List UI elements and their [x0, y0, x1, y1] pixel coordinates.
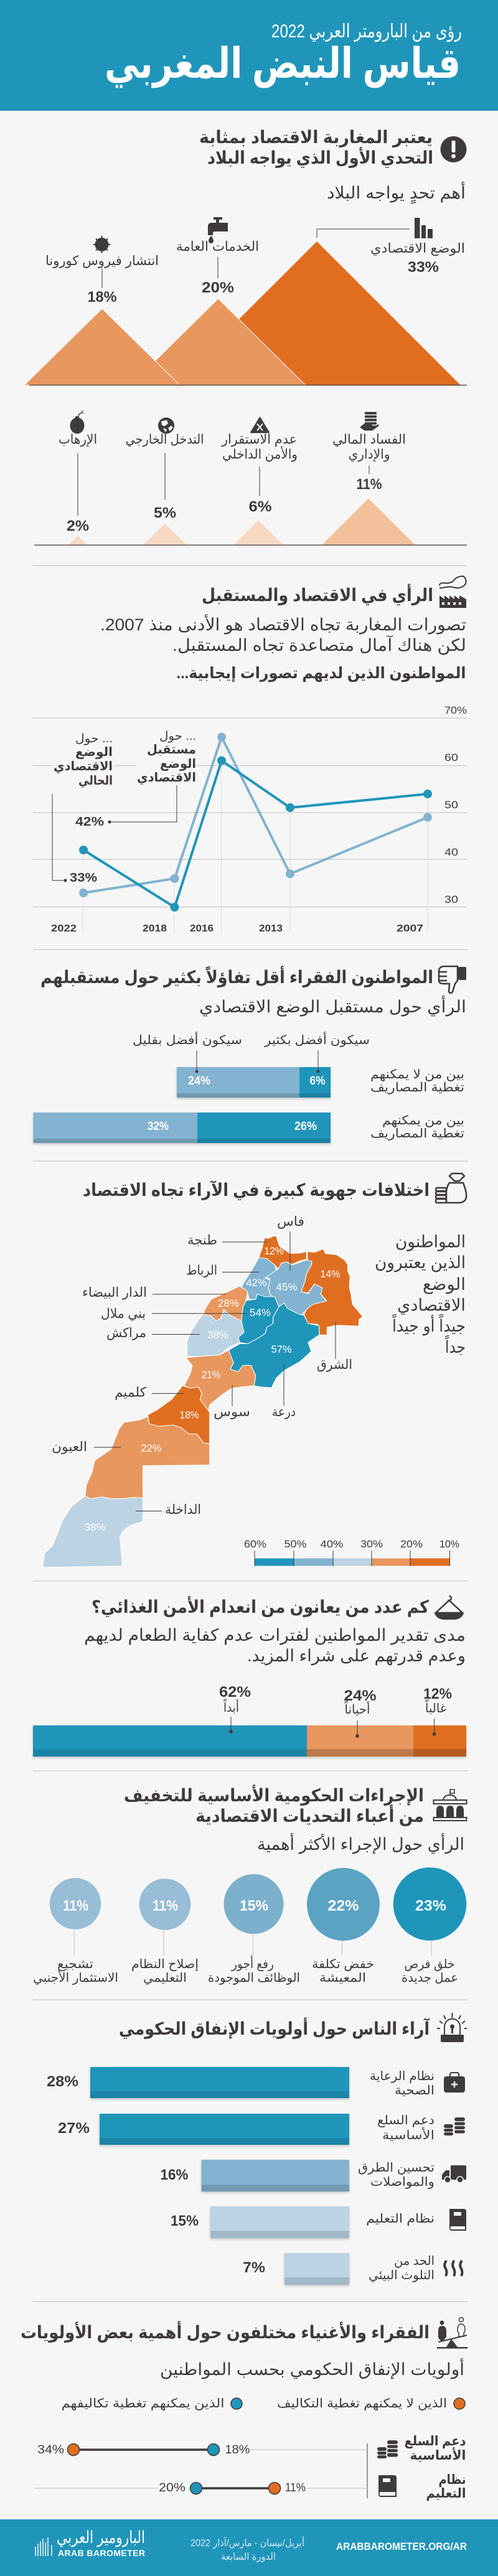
row label 2: بين من يمكنهم [382, 1114, 464, 1127]
bar: education: 15% [171, 2213, 199, 2229]
value 20: 20% [202, 279, 234, 296]
label interference: التدخل الخارجي [126, 432, 204, 447]
footer [0, 2519, 498, 2576]
subheading: الرأي حول مستقبل الوضع الاقتصادي [199, 995, 466, 1017]
bar: healthcare: الصحية [395, 2084, 435, 2098]
panel: government measures [33, 1785, 467, 1986]
panel: top challenges [24, 128, 467, 545]
annotation future: الاقتصادي [137, 771, 196, 785]
map region labels: الرباط [186, 1263, 217, 1278]
dumbbell: subsidies [34, 2434, 466, 2463]
label instability [221, 432, 298, 462]
value 33: 33% [408, 259, 439, 276]
dumbbell: subsidies: دعم السلع [405, 2434, 466, 2448]
icon: money bag [436, 1174, 466, 1203]
stacked bar: can cover expenses: 32% [148, 1120, 169, 1133]
stacked bar: can cover expenses [34, 1113, 331, 1143]
map values [85, 1245, 340, 1533]
dumbbell: education: نظام [438, 2473, 466, 2487]
icon: factory [439, 576, 466, 608]
legend labels: سيكون أفضل بكثير [264, 1032, 370, 1047]
annotation current: الاقتصادي [54, 760, 113, 774]
row label 1: تغطية المصاريف [370, 1081, 464, 1094]
year labels [51, 923, 423, 934]
icon: tap [208, 217, 228, 243]
label often: غالباً [425, 1699, 446, 1715]
icon: siren [437, 2013, 467, 2042]
text: map description [375, 1232, 466, 1356]
paragraph: وعدم قدرتهم على شراء المزيد. [247, 1646, 466, 1666]
label instability: والأمن الداخلي [222, 446, 298, 462]
legend: الذين لا يمكنهم تغطية التكاليف [277, 2397, 447, 2410]
legend labels [133, 1032, 370, 1047]
bubble: wages: 15% [240, 1898, 268, 1914]
icon: coin stacks [444, 2117, 465, 2135]
bubble: wages [208, 1874, 300, 1985]
map values: 38% [85, 1521, 106, 1533]
map leader lines [94, 1231, 336, 1511]
year labels: 2022 [51, 923, 77, 934]
map region labels: مراكش [106, 1326, 146, 1340]
leader economy [317, 229, 410, 238]
axis labels: 60 [444, 752, 458, 763]
year labels: 2016 [190, 923, 214, 934]
icon: seesaw [437, 2317, 467, 2348]
bubble: jobs [393, 1867, 466, 1985]
legend [61, 2397, 465, 2410]
map legend: 30% [360, 1538, 383, 1550]
text: map description: جداً [444, 1335, 466, 1356]
label corruption: والإداري [349, 447, 390, 462]
stacked bar: cannot cover expenses: 24% [188, 1075, 210, 1088]
heading: آراء الناس حول أولويات الإنفاق الحكومي [119, 2017, 430, 2039]
bubble: jobs: خلق فرص [405, 1958, 454, 1971]
bar: education: نظام التعليم [366, 2212, 435, 2226]
paragraph: تصورات المغاربة تجاه الاقتصاد هو الأدنى منذ 2007. [100, 614, 466, 635]
panel: poor less optimistic [34, 966, 466, 1143]
icon: book small [378, 2475, 397, 2497]
label often [423, 1686, 452, 1715]
value 18: 18% [87, 289, 117, 306]
paragraph: مدى تقدير المواطنين لفترات عدم كفاية الطعام لديهم [84, 1626, 466, 1645]
dumbbell: subsidies: 18% [225, 2443, 250, 2457]
panel: rich and poor [21, 2317, 467, 2501]
icon: globe [158, 418, 174, 434]
map region labels: الداخلة [165, 1503, 201, 1517]
subheading: أولويات الإنفاق الحكومي بحسب المواطنين [160, 2358, 464, 2379]
legend labels: سيكون أفضل بقليل [133, 1032, 242, 1047]
label corruption [332, 432, 406, 462]
bar: education [171, 2206, 466, 2238]
icon: book [449, 2209, 466, 2231]
label sometimes [344, 1687, 376, 1717]
annotation current: الحالي [78, 774, 113, 788]
map region labels: العيون [52, 1440, 87, 1454]
paragraph [100, 614, 466, 655]
bubble: cost of living: المعيشة [319, 1971, 366, 1985]
map values: 38% [207, 1329, 228, 1341]
year labels: 2018 [143, 923, 167, 934]
dumbbell: education: التعليم [426, 2486, 466, 2501]
panel: spending priorities [47, 2013, 467, 2285]
label never: أبداً [223, 1699, 239, 1715]
survey dates [190, 2536, 304, 2563]
bubble: foreign investment: الاستثمار الأجنبي [33, 1970, 118, 1986]
label covid: انتشار فيروس كورونا [45, 254, 159, 268]
series: future economy [79, 733, 432, 897]
icon: coin stacks small [377, 2440, 398, 2458]
heading: اختلافات جهوية كبيرة في الآراء تجاه الاقتصاد [83, 1180, 430, 1200]
legend: الذين يمكنهم تغطية تكاليفهم [61, 2397, 224, 2410]
heading: كم عدد من يعانون من انعدام الأمن الغذائي؟ [92, 1596, 430, 1617]
map region labels: الشرق [317, 1358, 352, 1372]
map region labels: درعة [272, 1405, 296, 1419]
heading: الرأي في الاقتصاد والمستقبل [202, 584, 433, 605]
map region labels [52, 1215, 352, 1517]
bar: pollution [243, 2253, 462, 2285]
bubble: cost of living [307, 1868, 380, 1985]
text: map description: الذين يعتبرون [375, 1253, 466, 1272]
map values: 12% [264, 1245, 284, 1257]
heading: التحدي الأول الذي يواجه البلاد [207, 147, 433, 168]
bar: subsidies: دعم السلع [377, 2114, 435, 2127]
label often: 12% [423, 1686, 452, 1702]
label sometimes: 24% [344, 1687, 376, 1704]
icon: thumbs down [439, 966, 466, 993]
bar: subsidies: الأساسية [382, 2127, 435, 2142]
chart: mountain triangles top row [24, 241, 467, 385]
row label 1: بين من لا يمكنهم [370, 1068, 464, 1081]
dumbbell: education [34, 2473, 466, 2501]
survey dates: الدورة السابعة [221, 2552, 276, 2563]
logo: ARAB BAROMETER [58, 2548, 145, 2558]
icon: bars [415, 218, 433, 238]
text: map description: جيداً أو جيداً [392, 1314, 466, 1336]
year labels: 2013 [259, 923, 283, 934]
icon: medkit [444, 2073, 465, 2093]
bar: healthcare: نظام الرعاية [370, 2070, 435, 2083]
heading: الإجراءات الحكومية الأساسية للتخفيف [124, 1785, 424, 1806]
panel: food insecurity [33, 1596, 466, 1757]
label never [219, 1684, 251, 1715]
map values: 42% [247, 1277, 266, 1289]
bubble: foreign investment [33, 1878, 118, 1986]
bubble: wages: الوظائف الموجودة [208, 1971, 300, 1985]
text: map description: الاقتصادي [397, 1295, 466, 1315]
map legend: 10% [439, 1538, 459, 1550]
annotation current [52, 732, 113, 885]
map legend [244, 1538, 459, 1566]
icon: steam [444, 2261, 462, 2276]
annotation future: ... حول [159, 730, 196, 743]
bar: pollution: 7% [243, 2259, 265, 2276]
icon: truck [442, 2165, 466, 2183]
map of Morocco [43, 1236, 363, 1567]
bar: pollution: التلوث البيئي [369, 2269, 435, 2283]
value 2: 2% [67, 518, 89, 534]
subtitle: رؤى من البارومتر العربي 2022 [271, 21, 462, 42]
dumbbell: education: 11% [285, 2481, 306, 2494]
map values: 18% [179, 1409, 199, 1421]
bubble: foreign investment: 11% [63, 1898, 88, 1914]
subheading: الرأي حول الإجراء الأكثر أهمية [257, 1832, 464, 1854]
icon: parliament [433, 1789, 467, 1821]
map legend: 60% [244, 1538, 266, 1550]
paragraph [84, 1626, 466, 1666]
label sometimes: أحياناً [344, 1701, 370, 1717]
bar: roads: تحسين الطرق [358, 2161, 435, 2175]
bubble: cost of living: خفض تكلفة [312, 1958, 374, 1971]
paragraph: لكن هناك آمال متصاعدة تجاه المستقبل. [172, 635, 466, 655]
label services: الخدمات العامة [176, 240, 259, 254]
label terrorism: الإرهاب [59, 432, 97, 447]
dumbbell: subsidies: الأساسية [410, 2447, 466, 2463]
bar: pollution: الحد من [394, 2254, 435, 2268]
logo [35, 2528, 145, 2558]
axis labels: 30 [444, 894, 458, 905]
axis labels: 70% [444, 704, 467, 716]
annotation current: الوضع [75, 745, 113, 759]
map legend: 50% [284, 1538, 306, 1550]
bubble: education reform: إصلاح النظام [131, 1958, 199, 1972]
map region labels: فاس [277, 1215, 304, 1229]
axis labels [444, 704, 467, 905]
annotation future [75, 730, 196, 829]
label never: 62% [219, 1684, 251, 1701]
heading [124, 1785, 424, 1826]
icon: warning triangle [251, 418, 269, 432]
map values: 45% [276, 1281, 298, 1293]
panel: economy and future [33, 576, 467, 934]
header banner [0, 0, 498, 111]
stacked bar: food [33, 1717, 466, 1757]
axis labels: 50 [444, 799, 458, 811]
icon: exclamation [441, 136, 467, 162]
map region labels: كلميم [115, 1385, 146, 1400]
dumbbell: subsidies: 34% [37, 2443, 64, 2457]
bubble: cost of living: 22% [327, 1898, 359, 1914]
map values: 28% [218, 1297, 239, 1309]
heading: الفقراء والأغنياء مختلفون حول أهمية بعض الأولويات [21, 2321, 430, 2343]
value 5: 5% [154, 505, 176, 521]
icon: virus [93, 236, 110, 253]
map values: 21% [202, 1369, 220, 1381]
bar: roads: 16% [161, 2167, 188, 2183]
dumbbell: education: 20% [159, 2481, 186, 2494]
annotation future: الوضع [160, 757, 196, 771]
bar: roads: والمواصلات [370, 2175, 435, 2189]
heading [199, 128, 433, 168]
axis labels: 40 [444, 846, 458, 858]
stacked bar: can cover expenses: 26% [294, 1120, 317, 1133]
website: ARABBAROMETER.ORG/AR [336, 2541, 467, 2552]
subheading: أهم تحدٍ يواجه البلاد [327, 181, 466, 204]
label instability: عدم الاستقرار [221, 432, 297, 447]
chart subtitle: المواطنون الذين لديهم تصورات إيجابية... [177, 665, 466, 683]
bar: healthcare [47, 2067, 465, 2098]
value 6: 6% [249, 498, 271, 515]
year labels: 2007 [397, 923, 423, 934]
chart: mountain triangles lower row [34, 498, 467, 545]
map region labels: طنجة [187, 1233, 217, 1248]
bubble: jobs: 23% [415, 1898, 446, 1914]
annotation future: مستقبل [147, 743, 196, 757]
map values: 57% [271, 1343, 291, 1355]
map values: 22% [141, 1442, 162, 1454]
line chart [33, 704, 467, 934]
bar: subsidies [58, 2114, 465, 2145]
panel: regional differences [43, 1174, 466, 1567]
icon: bomb [70, 411, 85, 434]
value 11: 11% [356, 476, 382, 493]
bubble: foreign investment: تشجيع [57, 1958, 93, 1971]
map region labels: سوس [214, 1405, 250, 1419]
heading: يعتبر المغاربة الاقتصاد بمثابة [199, 128, 433, 147]
map region labels: الدار البيضاء [82, 1286, 147, 1300]
stems [74, 1930, 431, 1956]
series: current economy [79, 757, 432, 912]
icon: tagine [435, 1596, 464, 1620]
label corruption: الفساد المالي [332, 432, 406, 447]
survey dates: أبريل/نيسان - مارس/آذار 2022 [190, 2536, 304, 2549]
bar: subsidies: 27% [58, 2120, 90, 2137]
bubble: education reform [131, 1878, 199, 1986]
bubble: education reform: 11% [153, 1898, 178, 1914]
bar: roads [161, 2160, 466, 2191]
text: map description: الوضع [423, 1275, 466, 1294]
row label 2 [370, 1114, 464, 1141]
map values: 14% [320, 1268, 340, 1280]
text: map description: المواطنون [395, 1232, 466, 1252]
icon: coins in hand [360, 412, 378, 431]
heading: المواطنون الفقراء أقل تفاؤلاً بكثير حول مستقبلهم [40, 966, 433, 987]
label economy: الوضع الاقتصادي [370, 241, 465, 256]
row label 2: تغطية المصاريف [370, 1127, 464, 1141]
bubble: jobs: عمل جديدة [402, 1971, 458, 1985]
stacked bar: cannot cover expenses [177, 1050, 331, 1098]
map region labels: بني ملال [101, 1307, 146, 1321]
map legend: 40% [320, 1538, 344, 1550]
annotation future: 42% [75, 815, 104, 829]
bubble: education reform: التعليمي [143, 1971, 187, 1986]
map legend: 20% [400, 1538, 423, 1550]
bubble: wages: رفع أجور [231, 1956, 274, 1971]
annotation current: 33% [70, 871, 97, 885]
heading: من أعباء التحديات الاقتصادية [195, 1804, 424, 1826]
map values: 54% [250, 1307, 271, 1318]
bar: healthcare: 28% [47, 2073, 78, 2090]
annotation current: ... حول [75, 732, 113, 745]
stacked bar: cannot cover expenses: 6% [310, 1075, 326, 1088]
logo: البارومير العربي [57, 2528, 145, 2547]
row label 1 [370, 1068, 464, 1094]
